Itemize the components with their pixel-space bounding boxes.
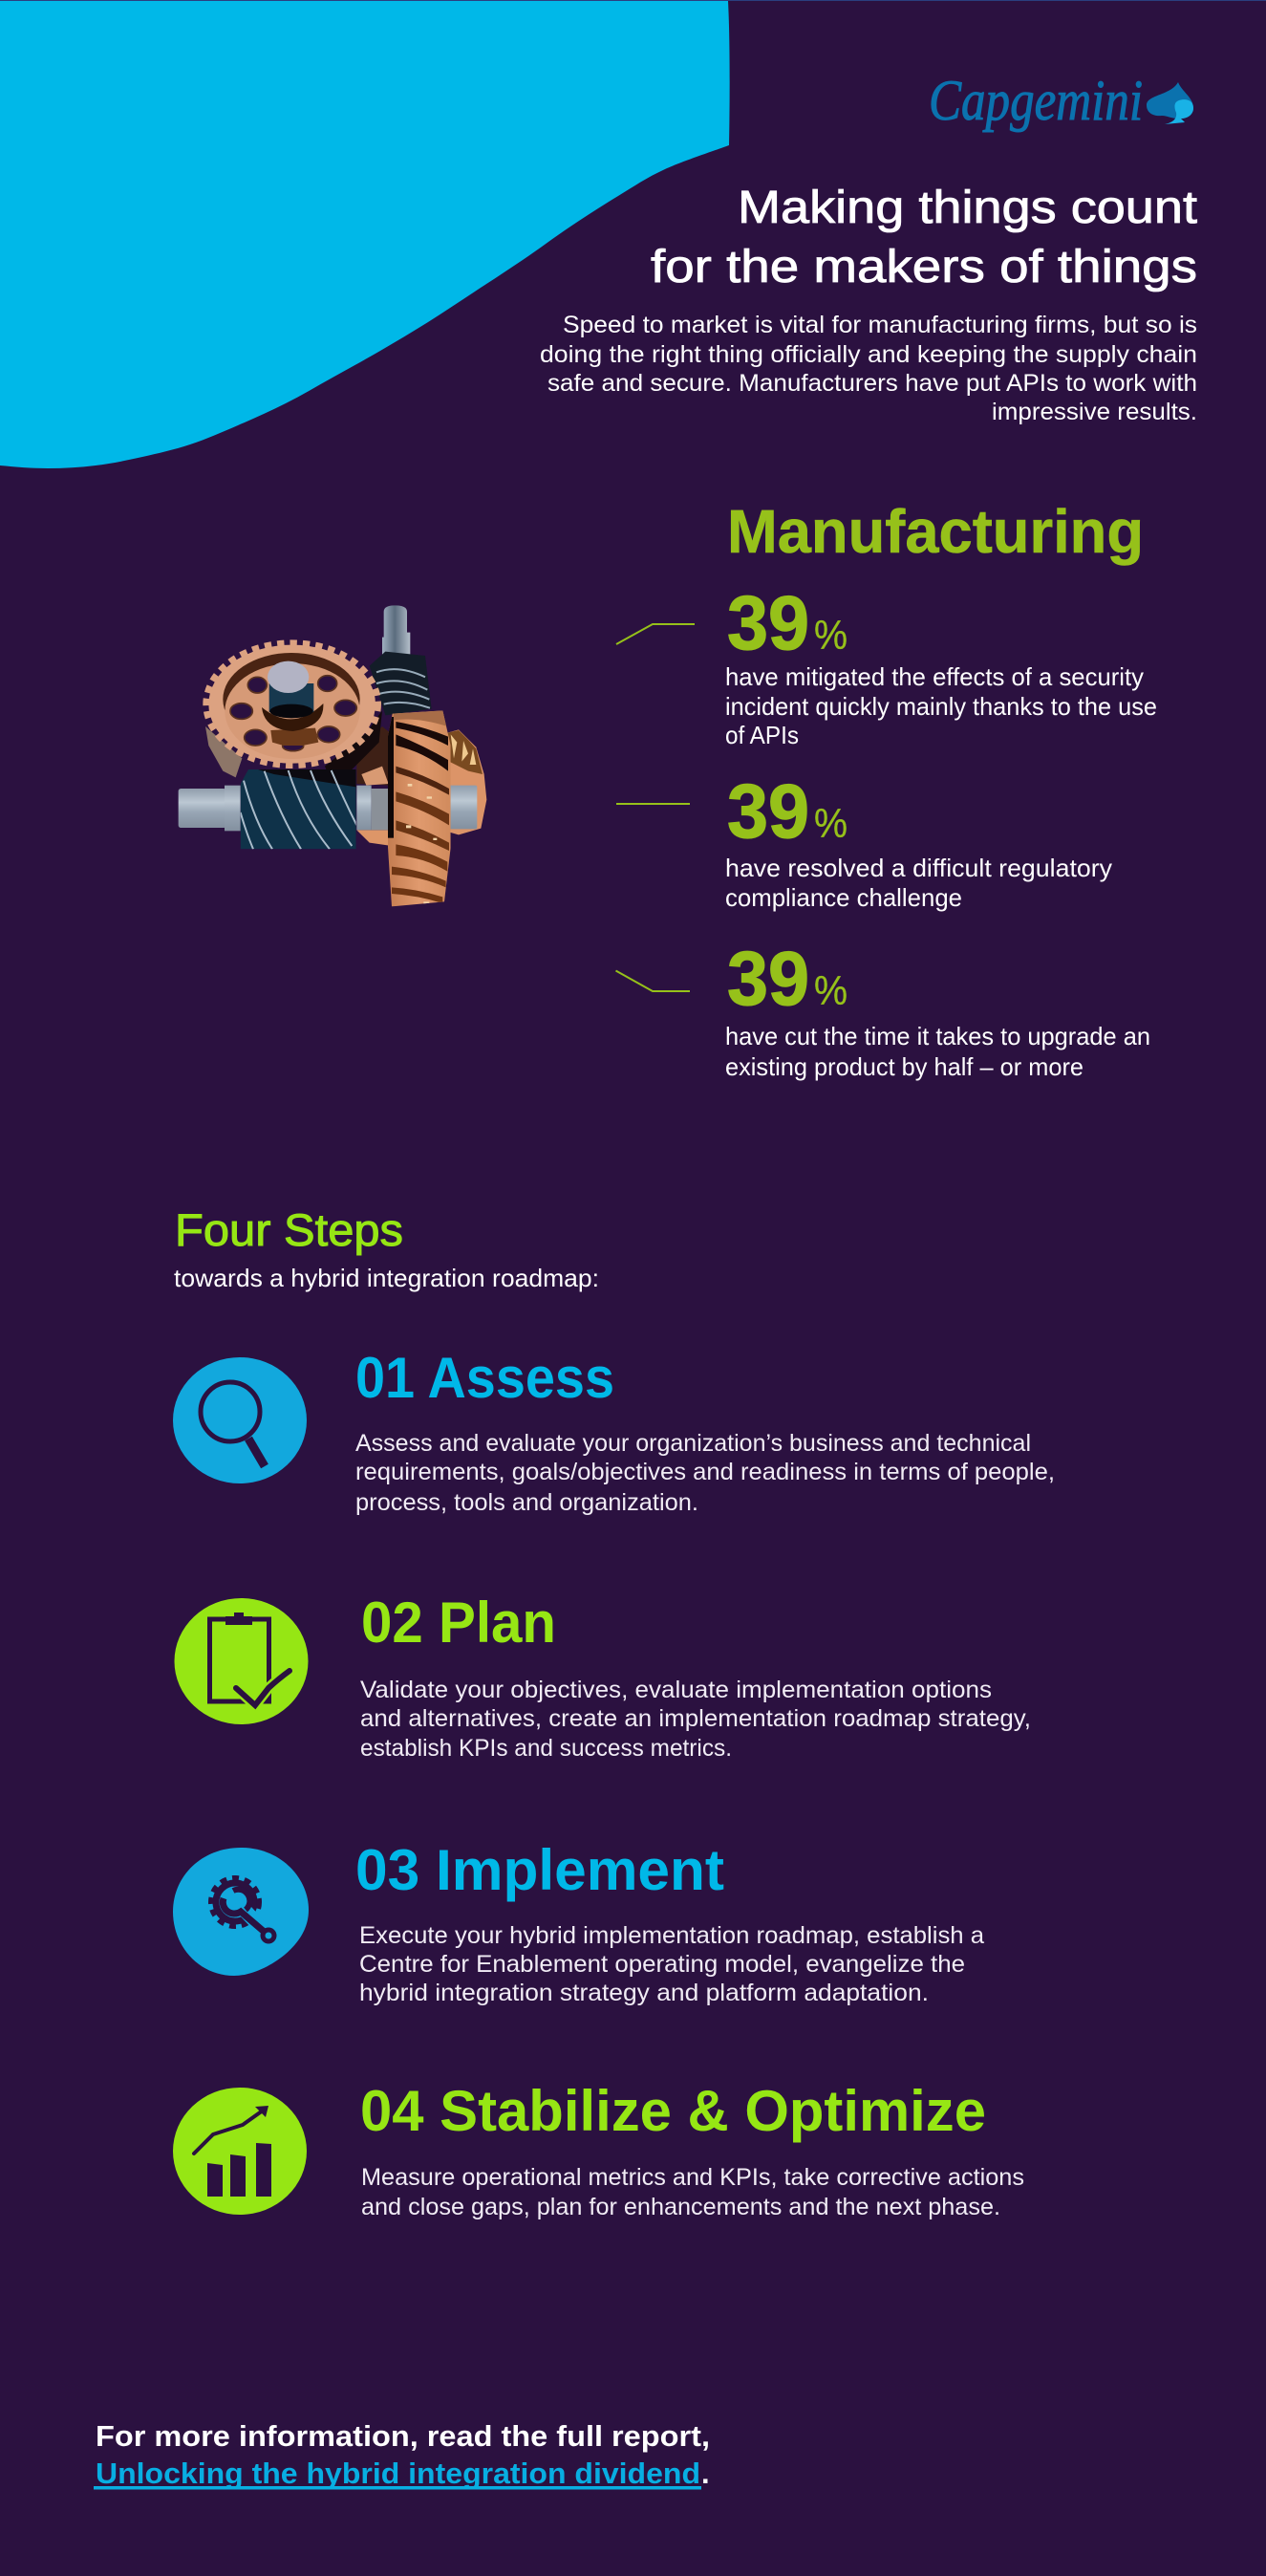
step 02 heading: 02 Plan <box>361 1591 556 1655</box>
footer call to action: . <box>701 2457 710 2490</box>
top vertical shaft <box>382 605 410 655</box>
blue helical pinion <box>241 769 356 849</box>
stat 3 <box>725 936 1150 1081</box>
stat 3 description: have cut the time it takes to upgrade an <box>725 1022 1150 1050</box>
intro text: Speed to market is vital for manufacturing firms, but so is <box>563 312 1197 338</box>
stat 1 <box>725 580 1157 749</box>
Capgemini logo <box>929 69 1193 132</box>
connector line 2 <box>616 803 690 805</box>
step 01 body <box>355 1430 1055 1516</box>
stat 1 description: have mitigated the effects of a security <box>725 662 1144 691</box>
stat 3 number: 39 <box>727 936 809 1021</box>
intro text: doing the right thing officially and keeping the supply chain <box>540 341 1197 368</box>
section heading: Manufacturing: Manufacturing <box>727 497 1144 566</box>
stat 2 number: 39 <box>727 768 809 854</box>
stat 1 description: of APIs <box>725 721 799 749</box>
step 03 body: hybrid integration strategy and platform adaptation. <box>359 1980 929 2006</box>
stat 2 description: have resolved a difficult regulatory <box>725 854 1112 882</box>
illustration: gears <box>179 605 486 908</box>
step 01 body: requirements, goals/objectives and readiness in terms of people, <box>355 1459 1055 1485</box>
large edge-on copper gear <box>385 709 452 908</box>
large copper gear <box>205 643 382 777</box>
dark upper pinion <box>370 652 432 715</box>
gear thickness lower right <box>325 710 382 774</box>
connector line 3 <box>615 971 690 991</box>
footer call to action: Unlocking the hybrid integration dividend <box>96 2457 700 2490</box>
step 01 heading: 01 Assess <box>355 1346 614 1410</box>
title: for the makers of things <box>651 242 1197 292</box>
step 04 body: Measure operational metrics and KPIs, take corrective actions <box>361 2164 1024 2191</box>
step 03 icon: gear and wrench <box>173 1848 309 1976</box>
back copper gear <box>447 729 486 834</box>
stat 3 description <box>725 1022 1150 1081</box>
stat 1 description <box>725 662 1157 749</box>
step 02 body <box>360 1677 1031 1762</box>
stat 2 <box>725 768 1112 912</box>
step 02 body: Validate your objectives, evaluate implementation options <box>360 1677 992 1703</box>
logo wordmark: Capgemini <box>929 69 1143 132</box>
hub crescent <box>270 728 318 746</box>
title: Making things count <box>738 183 1197 233</box>
title <box>651 183 1197 292</box>
step 04 heading: 04 Stabilize & Optimize <box>360 2079 986 2143</box>
gear holes <box>230 676 356 751</box>
step 03 body: Centre for Enablement operating model, evangelize the <box>359 1951 965 1978</box>
middle shaft collars <box>356 786 392 846</box>
intro text: impressive results. <box>992 399 1197 425</box>
stat 2 number: % <box>814 801 848 847</box>
subheading: towards a hybrid integration roadmap: <box>174 1264 599 1292</box>
step 02 icon: clipboard <box>174 1598 308 1724</box>
right shaft stub <box>449 786 477 829</box>
connector line 1 <box>616 624 695 644</box>
intro text: safe and secure. Manufacturers have put APIs to work with <box>547 370 1197 397</box>
logo spade icon <box>1147 82 1193 124</box>
gear thickness lower left <box>205 726 242 777</box>
step 04 icon: growth chart <box>173 2088 307 2215</box>
step 02 body: and alternatives, create an implementation roadmap strategy, <box>360 1705 1031 1732</box>
stat 2 description <box>725 854 1112 912</box>
left horizontal shaft <box>179 786 241 831</box>
stat 1 number: 39 <box>727 580 809 665</box>
step 04 body <box>361 2164 1024 2220</box>
footer call to action: For more information, read the full report, <box>96 2419 710 2453</box>
center shaft <box>268 661 313 718</box>
step 03 body: Execute your hybrid implementation roadmap, establish a <box>359 1922 984 1949</box>
step 01 icon: magnifier <box>173 1357 307 1483</box>
intro text <box>540 312 1197 425</box>
stat 1 description: incident quickly mainly thanks to the use <box>725 692 1157 721</box>
stat 3 description: existing product by half – or more <box>725 1052 1084 1081</box>
step 03 heading: 03 Implement <box>355 1838 724 1902</box>
step 04 body: and close gaps, plan for enhancements and the next phase. <box>361 2194 1000 2220</box>
step 01 body: process, tools and organization. <box>355 1489 698 1516</box>
step 02 body: establish KPIs and success metrics. <box>360 1735 732 1762</box>
dark and copper mesh behind large gear <box>356 726 390 786</box>
step 03 body <box>359 1922 984 2006</box>
step 01 body: Assess and evaluate your organization’s business and technical <box>355 1430 1031 1457</box>
footer call to action <box>94 2419 710 2490</box>
stat 2 description: compliance challenge <box>725 883 962 912</box>
blue wave shape <box>0 1 730 468</box>
stat 3 number: % <box>814 968 848 1014</box>
heading: Four Steps: Four Steps <box>175 1204 403 1255</box>
stat 1 number: % <box>814 613 848 659</box>
